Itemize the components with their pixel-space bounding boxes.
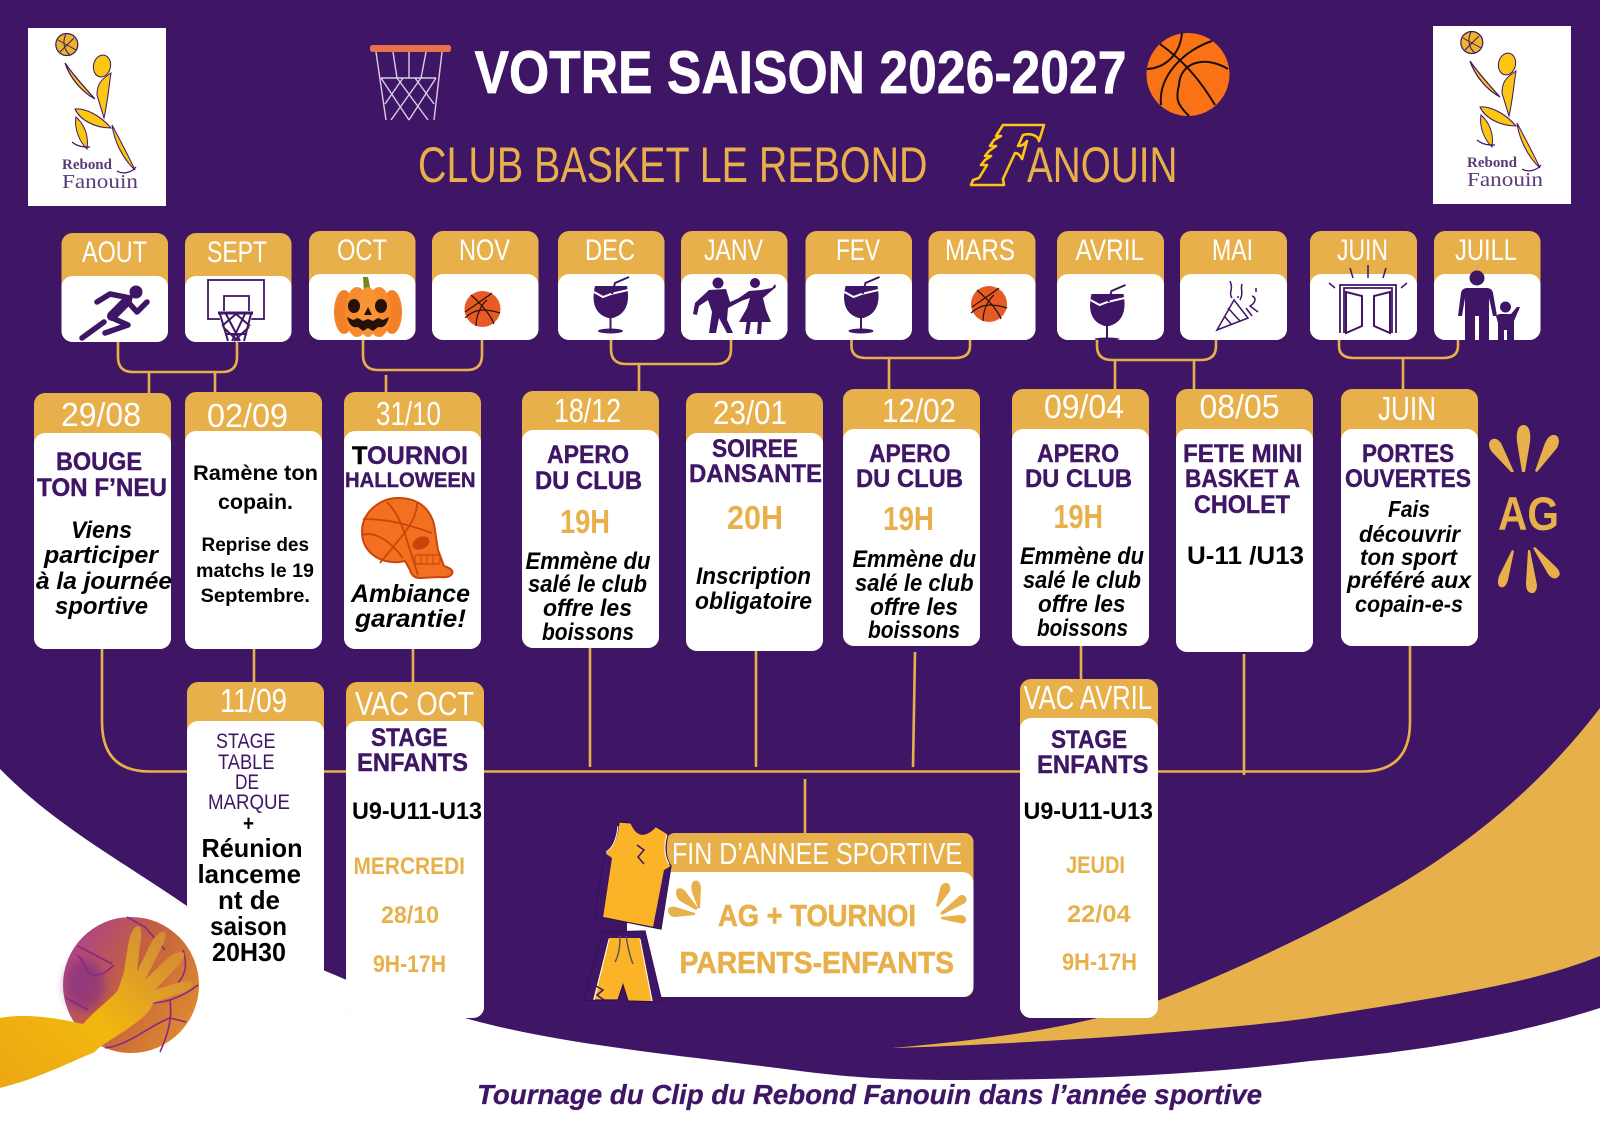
event: JUIN: copain-e-s [1355, 591, 1463, 617]
month: DEC: DEC [585, 234, 635, 267]
event: 29/08: 29/08 [61, 396, 141, 433]
event: 11/09: TABLE [218, 751, 274, 774]
event: 09/04: Emmène du [1020, 543, 1144, 570]
event: 09/04 [1012, 388, 1149, 646]
event: 11/09: 20H30 [212, 937, 286, 967]
month: JUIN [1310, 231, 1417, 340]
logo right [1433, 26, 1571, 204]
month: NOV [432, 231, 538, 340]
month: JANV: JANV [704, 234, 763, 267]
event: VAC AVRIL: VAC AVRIL [1024, 679, 1152, 716]
month: SEPT [185, 233, 292, 342]
icon: glass [1090, 285, 1126, 340]
event: 09/04: boissons [1037, 615, 1128, 642]
month: FEV [806, 231, 912, 340]
event: 12/02: offre les [870, 594, 958, 621]
event: VAC OCT [346, 682, 484, 1018]
icon: parent and child [1458, 270, 1520, 340]
event: 08/05: BASKET A [1185, 465, 1300, 493]
month: AOUT: AOUT [82, 236, 147, 269]
event: 29/08: sportive [55, 593, 148, 620]
event: 31/10 [344, 392, 481, 649]
connector lines [102, 340, 1458, 833]
event: VAC OCT: 9H-17H [373, 951, 446, 978]
event: VAC AVRIL: STAGE [1051, 726, 1127, 754]
month: MAI [1180, 231, 1287, 340]
event: 18/12: 18/12 [554, 392, 621, 429]
event: VAC OCT: VAC OCT [355, 685, 474, 722]
event: 31/10: 31/10 [376, 395, 441, 432]
month: JANV [681, 231, 788, 340]
event: 18/12: APERO [547, 441, 629, 469]
event: VAC AVRIL: JEUDI [1066, 852, 1125, 879]
title: VOTRE SAISON 2026-2027 [474, 39, 1126, 106]
event: 11/09: 11/09 [220, 682, 287, 719]
event: 11/09: saison [210, 911, 287, 941]
event: 29/08: participer [43, 542, 160, 569]
event: 08/05: U-11 /U13 [1187, 542, 1304, 570]
event: 08/05: CHOLET [1194, 491, 1290, 519]
event: 18/12: offre les [543, 595, 632, 622]
panel: fin d'annee sportive: AG + TOURNOI [718, 898, 916, 933]
event: 12/02: APERO [869, 440, 950, 468]
event: 18/12: DU CLUB [535, 467, 642, 495]
event: VAC AVRIL: 9H-17H [1062, 949, 1137, 976]
event: 02/09: copain. [218, 491, 293, 514]
event: 11/09: DE [235, 771, 259, 794]
event: 09/04: 09/04 [1044, 388, 1124, 425]
event: VAC OCT: MERCREDI [354, 853, 465, 880]
event: 31/10: TOURNOI [352, 442, 468, 470]
event: 23/01 [686, 393, 823, 651]
event: 08/05: 08/05 [1200, 388, 1280, 425]
event: 18/12: boissons [542, 619, 634, 646]
event: 11/09 [187, 682, 324, 985]
panel: fin d'annee sportive: PARENTS-ENFANTS [680, 945, 954, 980]
event: VAC AVRIL: 22/04 [1067, 901, 1131, 928]
event: 11/09: MARQUE [208, 791, 290, 814]
event: JUIN: préféré aux [1346, 567, 1472, 593]
icon: open doors [1329, 265, 1407, 333]
event: 29/08 [34, 393, 172, 649]
icon: dancers [693, 278, 776, 334]
month: MAI: MAI [1212, 234, 1253, 267]
event: 29/08: à la journée [36, 568, 172, 595]
event: 23/01: 20H [727, 499, 783, 536]
month: OCT [309, 231, 416, 340]
logo right: Rebond [1467, 155, 1518, 171]
icon: jersey [595, 822, 671, 929]
event: 31/10: garantie! [354, 605, 466, 633]
event: 23/01: obligatoire [695, 588, 812, 615]
event: 09/04: 19H [1054, 498, 1103, 535]
event: 09/04: APERO [1037, 440, 1119, 468]
event: 09/04: salé le club [1023, 567, 1141, 594]
icon: glass [594, 277, 629, 334]
event: 02/09: Ramène ton [193, 462, 318, 485]
event: 18/12: 19H [560, 503, 610, 540]
panel: fin d'annee sportive: FIN D’ANNEE SPORTIVE [672, 836, 962, 871]
event: 23/01: SOIREE [712, 435, 798, 463]
month: AVRIL: AVRIL [1076, 234, 1144, 267]
month: JUILL [1434, 231, 1540, 340]
event: 02/09: Reprise des [202, 535, 309, 556]
event: 18/12: Emmène du [526, 548, 651, 575]
icon: hand holding basketball [0, 917, 199, 1088]
event: JUIN: OUVERTES [1345, 465, 1471, 493]
event: JUIN [1341, 389, 1478, 646]
event: 11/09: Réunion [202, 833, 302, 863]
event: 18/12 [522, 391, 659, 648]
event: 29/08: TON F’NEU [37, 474, 167, 502]
icon: runner [82, 286, 147, 338]
event: 11/09: + [243, 811, 254, 836]
panel: fin d'annee sportive [627, 833, 974, 997]
icon: left rays [668, 880, 701, 917]
event: VAC OCT: U9-U11-U13 [352, 798, 482, 825]
event: 23/01: Inscription [696, 563, 811, 590]
event: 02/09: 02/09 [207, 397, 288, 434]
event: 23/01: DANSANTE [689, 460, 822, 488]
icon: party popper [1217, 281, 1258, 330]
callout: AG with rays: AG [1498, 487, 1559, 540]
callout: AG with rays [1489, 425, 1560, 593]
event: 12/02: salé le club [855, 570, 974, 597]
month: AOUT [62, 233, 168, 342]
event: 11/09: STAGE [216, 730, 276, 753]
event: JUIN: Fais [1388, 496, 1430, 522]
icon: basketball hoop and net [370, 45, 451, 120]
logo left [28, 28, 166, 206]
event: 31/10: Ambiance [350, 580, 470, 608]
icon: basketball [464, 291, 500, 327]
event: 29/08: Viens [71, 517, 132, 544]
event: 08/05: FETE MINI [1183, 440, 1302, 468]
background: gold swoosh [892, 708, 1600, 1048]
month: FEV: FEV [836, 234, 880, 267]
event: 12/02: 12/02 [882, 392, 956, 429]
event: 08/05 [1176, 388, 1313, 652]
event: VAC OCT: ENFANTS [357, 749, 468, 777]
icon: basketball skull [362, 498, 452, 578]
event: 09/04: DU CLUB [1025, 465, 1132, 493]
month: SEPT: SEPT [207, 236, 267, 269]
logo left: Rebond [62, 157, 113, 173]
event: 23/01: 23/01 [713, 394, 787, 431]
event: 29/08: BOUGE [56, 448, 142, 476]
event: JUIN: JUIN [1378, 390, 1436, 427]
event: JUIN: ton sport [1360, 544, 1458, 570]
event: 12/02: 19H [883, 500, 934, 537]
icon: pumpkin [334, 277, 402, 337]
icon: basketball [971, 286, 1007, 322]
event: JUIN: PORTES [1362, 440, 1454, 468]
event: 02/09 [185, 392, 322, 649]
month: NOV: NOV [459, 234, 510, 267]
event: 02/09: matchs le 19 [196, 561, 314, 582]
event: 18/12: salé le club [528, 571, 647, 598]
event: 12/02: Emmène du [852, 546, 976, 573]
event: 09/04: offre les [1038, 591, 1126, 618]
month: JUILL: JUILL [1455, 234, 1517, 267]
logo left: Fanouin [62, 171, 138, 193]
event: 31/10: HALLOWEEN [345, 469, 476, 492]
event: 11/09: lanceme [198, 859, 301, 889]
month: MARS: MARS [945, 234, 1015, 267]
event: VAC AVRIL: U9-U11-U13 [1024, 798, 1153, 825]
event: VAC OCT: STAGE [371, 724, 448, 752]
event: 12/02 [843, 389, 980, 646]
month: MARS [928, 231, 1036, 340]
event: 02/09: Septembre. [200, 586, 310, 607]
event: VAC OCT: 28/10 [381, 902, 439, 929]
icon: basketball [1146, 33, 1230, 116]
event: 12/02: DU CLUB [856, 465, 963, 493]
month: OCT: OCT [337, 234, 387, 267]
logo right: Fanouin [1467, 169, 1543, 191]
footer text: Tournage du Clip du Rebond Fanouin dans l’année sportive [477, 1079, 1262, 1110]
event: VAC AVRIL [1020, 679, 1158, 1018]
event: JUIN: découvrir [1359, 521, 1461, 547]
icon: backboard and net [208, 280, 264, 341]
icon: stylised letter F [971, 125, 1044, 185]
icon: shorts [584, 931, 662, 1002]
icon: glass [844, 277, 880, 334]
icon: right rays [936, 883, 966, 923]
subtitle: CLUB BASKET LE REBOND [418, 137, 928, 193]
event: 11/09: nt de [218, 885, 280, 915]
subtitle: Fanouin: ANOUIN [1027, 137, 1178, 193]
event: 12/02: boissons [868, 617, 960, 644]
event: VAC AVRIL: ENFANTS [1037, 751, 1148, 779]
month: AVRIL [1057, 231, 1164, 340]
month: JUIN: JUIN [1337, 234, 1388, 267]
month: DEC [558, 231, 664, 340]
